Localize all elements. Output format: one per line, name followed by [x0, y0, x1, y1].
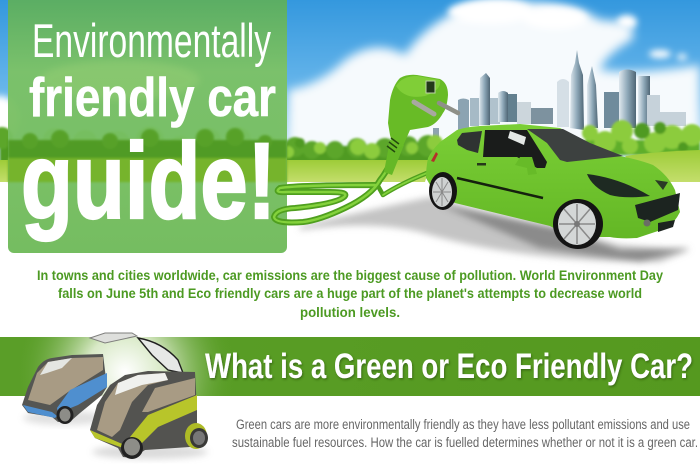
- blue concept car: [22, 354, 107, 425]
- hero scene: [0, 0, 700, 182]
- open door: [90, 333, 183, 373]
- plug pins: [414, 102, 434, 114]
- green car: [426, 124, 680, 249]
- window reflection: [508, 131, 526, 145]
- tail light: [431, 152, 438, 162]
- plug vents: [387, 138, 399, 152]
- title line 2: friendly car: [29, 66, 276, 128]
- fog light: [644, 220, 650, 226]
- intro text: [37, 267, 663, 320]
- banner glow: [10, 337, 240, 396]
- rear wheel: [429, 172, 457, 210]
- intro text: pollution levels.: [300, 304, 400, 320]
- door handle: [477, 163, 486, 166]
- panel cloud tint: [40, 60, 200, 100]
- plug window: [426, 81, 435, 93]
- body text: [232, 417, 698, 450]
- power cord and plug: [274, 75, 458, 222]
- mirror: [515, 157, 537, 175]
- blue car panel: [57, 373, 107, 413]
- blue car frame: [22, 354, 107, 422]
- rear window: [457, 131, 482, 153]
- badge: [655, 180, 668, 190]
- plug body: [388, 75, 448, 150]
- tree line: [0, 120, 700, 162]
- cord coil: [274, 142, 427, 222]
- yellow front wheel: [121, 437, 143, 459]
- front grille: [635, 193, 680, 222]
- right grass: [625, 150, 700, 182]
- grass field: [0, 160, 430, 182]
- title line 3: guide!: [21, 120, 276, 241]
- green title panel: [8, 0, 287, 253]
- yellow concept car: [90, 333, 208, 459]
- yellow side glass: [142, 378, 195, 412]
- sky: [0, 0, 700, 165]
- headlight: [587, 174, 650, 197]
- cable neck: [384, 140, 404, 175]
- car body: [426, 124, 680, 238]
- ground shadow: [300, 197, 690, 262]
- yellow car glass: [97, 373, 168, 437]
- lower grille: [658, 220, 675, 232]
- blue car wheel: [56, 406, 74, 424]
- side window: [483, 130, 547, 168]
- clouds: [0, 0, 700, 150]
- section banner: [0, 337, 700, 396]
- yellow car panel: [125, 395, 197, 447]
- windshield: [527, 129, 623, 162]
- city skyline: [433, 50, 686, 138]
- title line 1: Environmentally: [32, 14, 271, 67]
- panel tree band: [8, 128, 287, 182]
- yellow rear wheel: [185, 423, 207, 449]
- intro text: falls on June 5th and Eco friendly cars are a huge part of the planet's attempts to decrease world: [58, 285, 642, 301]
- yellow car frame: [90, 371, 197, 458]
- blue car glass: [28, 357, 103, 405]
- front wheel: [553, 199, 603, 249]
- side stripe: [457, 178, 543, 198]
